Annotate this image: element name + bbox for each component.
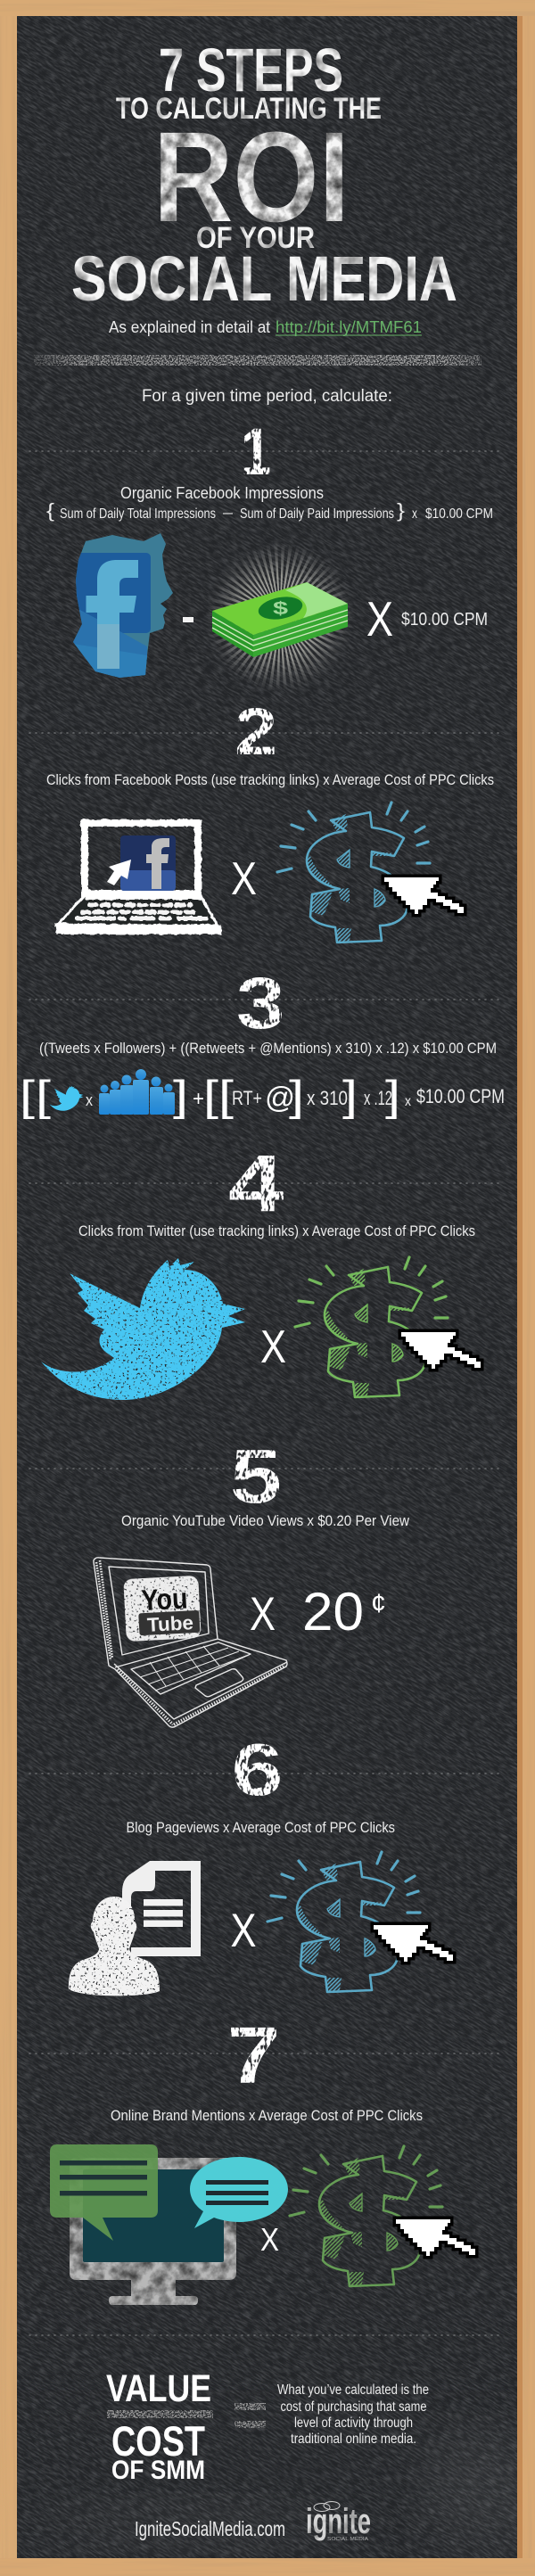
step 1 — [46, 415, 493, 682]
step 3 visual equation: x — [86, 1091, 93, 1109]
ignite logo: ignite — [306, 2502, 371, 2541]
numeral 2: 2 — [235, 695, 277, 769]
step 3 visual equation: ] — [173, 1072, 188, 1119]
step 6 — [69, 1728, 453, 1996]
step 3 visual equation: [ — [218, 1072, 234, 1119]
title line: to calculating the: TO CALCULATING THE — [116, 92, 382, 126]
icon: facebook head — [71, 531, 175, 682]
step 1 formula: $10.00 CPM — [425, 506, 493, 522]
title line: of your: OF YOUR — [196, 221, 315, 255]
numeral 5: 5 — [230, 1435, 282, 1519]
step 3 visual equation: x — [405, 1094, 411, 1109]
step 3 visual equation: [ — [36, 1072, 51, 1119]
multiply sign: X — [260, 2221, 279, 2258]
step 3 visual equation: + — [193, 1087, 204, 1111]
step 3 visual equation: x 310 — [307, 1087, 348, 1109]
icon: green dollar with cursor — [295, 1257, 481, 1397]
icon: green dollar with cursor — [290, 2146, 475, 2286]
chalk equals sign — [235, 2403, 266, 2428]
step 3 visual equation: [ — [203, 1072, 218, 1119]
twenty cents: ¢ — [371, 1589, 386, 1618]
fraction: VALUE — [106, 2367, 211, 2410]
step 5 — [94, 1435, 409, 1727]
step 1 formula: Sum of Daily Paid Impressions — [240, 506, 394, 522]
step 3 visual equation: ] — [289, 1072, 304, 1119]
explanation text — [277, 2383, 429, 2447]
step 1 formula — [46, 499, 493, 522]
step 3 visual equation: x .12 — [364, 1087, 392, 1109]
multiply sign: X — [260, 1321, 286, 1373]
step 1 heading: Organic Facebook Impressions — [120, 484, 324, 502]
step 1 formula: { — [46, 499, 54, 522]
summary: value over cost of smm — [106, 2367, 429, 2485]
footer url: IgniteSocialMedia.com — [135, 2517, 285, 2540]
explanation text: What you’ve calculated is the — [277, 2383, 429, 2398]
icon: blue dollar with cursor — [277, 802, 464, 942]
title — [71, 36, 457, 315]
title line: 7 steps: 7 STEPS — [159, 36, 343, 104]
step 3 visual equation: ] — [385, 1072, 400, 1119]
icon: twitter bird — [41, 1258, 245, 1400]
multiply sign: X — [230, 1905, 257, 1957]
step 1 formula: — — [223, 506, 233, 521]
subtitle with link: http://bit.ly/MTMF61 — [276, 318, 422, 336]
step 1 formula: } — [397, 499, 405, 522]
numeral 7: 7 — [226, 2012, 280, 2101]
step 3 — [20, 963, 505, 1119]
fraction — [106, 2367, 213, 2485]
step 7 heading: Online Brand Mentions x Average Cost of PPC Clicks — [111, 2108, 423, 2124]
fraction: OF SMM — [111, 2456, 205, 2485]
numeral 6: 6 — [232, 1728, 284, 1811]
step 5 heading: Organic YouTube Video Views x $0.20 Per View — [121, 1513, 409, 1529]
step 2 — [46, 695, 494, 942]
cyan speech bubble — [190, 2157, 288, 2228]
step 4 heading: Clicks from Twitter (use tracking links) x Average Cost of PPC Clicks — [78, 1223, 475, 1239]
subtitle with link: As explained in detail at — [109, 318, 270, 336]
title line: ROI: ROI — [153, 105, 350, 249]
step 4 — [41, 1140, 481, 1400]
multiply sign: X — [231, 853, 257, 905]
step 3 visual equation — [20, 1069, 505, 1119]
numeral 1: 1 — [241, 415, 271, 489]
numeral 3: 3 — [236, 963, 285, 1044]
monitor — [70, 2158, 236, 2305]
intro line: For a given time period, calculate: — [142, 387, 392, 406]
step 3 visual equation: RT+ — [232, 1087, 262, 1109]
green speech bubble — [50, 2144, 158, 2241]
cost label: $10.00 CPM — [401, 610, 488, 630]
icon: blue dollar with cursor — [268, 1852, 453, 1992]
multiply sign: X — [250, 1588, 276, 1641]
explanation text: traditional online media. — [291, 2432, 416, 2447]
icon: small twitter bird — [49, 1086, 83, 1111]
step 1 formula: x — [412, 506, 417, 522]
fraction: COST — [111, 2417, 205, 2465]
icon: sketched laptop with youtube logo — [94, 1558, 287, 1727]
icon: stack of money with rays: $ — [273, 599, 288, 619]
explanation text: level of activity through — [294, 2416, 413, 2431]
explanation text: cost of purchasing that same — [280, 2399, 426, 2415]
step 1 formula: Sum of Daily Total Impressions — [60, 506, 216, 522]
step 3 visual equation: @ — [265, 1081, 295, 1114]
youtube logo — [123, 1576, 202, 1642]
ignite logo — [306, 2502, 371, 2542]
numeral 4: 4 — [228, 1140, 284, 1229]
minus sign — [183, 617, 193, 622]
step 3 visual equation: [ — [20, 1072, 35, 1119]
step 3 visual equation: ] — [342, 1072, 358, 1119]
icon: crowd of followers — [99, 1069, 175, 1115]
ignite logo: SOCIAL MEDIA — [327, 2537, 369, 2542]
youtube logo: Tube — [146, 1611, 194, 1636]
icon: chalk laptop with facebook — [55, 823, 222, 934]
step 7 — [50, 2012, 475, 2305]
youtube logo: You — [141, 1581, 188, 1617]
title line: social media: SOCIAL MEDIA — [71, 244, 457, 315]
icon: monitor with speech bubbles — [50, 2144, 288, 2305]
icon: stack of money with rays — [212, 572, 348, 662]
step 3 visual equation: $10.00 CPM — [416, 1085, 505, 1107]
multiply sign: X — [366, 591, 393, 646]
twenty cents: 20 — [302, 1582, 364, 1642]
step 6 heading: Blog Pageviews x Average Cost of PPC Clicks — [127, 1820, 395, 1836]
icon: person with document — [69, 1861, 201, 1996]
chalk divider — [34, 355, 482, 366]
subtitle with link — [109, 318, 422, 336]
